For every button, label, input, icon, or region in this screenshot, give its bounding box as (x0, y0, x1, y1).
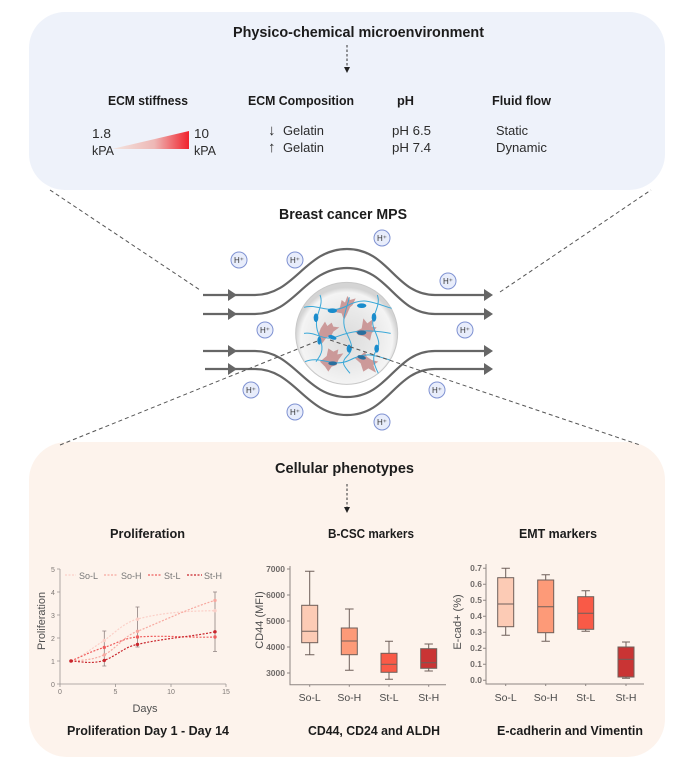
icons: H+ protons (231, 230, 473, 430)
line chart: proliferation: 10 (167, 689, 175, 696)
line chart: proliferation: 4 (51, 590, 55, 597)
box plot: CD44: So-L (299, 692, 321, 704)
box plot: CD44: So-H (337, 692, 361, 704)
box plot: CD44: 6000 (266, 590, 285, 600)
panel: B-CSC markers: CD44, CD24 and ALDH (308, 724, 440, 738)
panel: proliferation (36, 527, 230, 738)
box plot: CD44 (254, 564, 446, 704)
box plot: CD44: 3000 (266, 668, 285, 678)
icon: stiffness gradient wedge (112, 131, 189, 149)
column: ECM composition (248, 94, 354, 156)
panel: B-CSC markers (254, 527, 446, 738)
legend: So-H (121, 571, 142, 581)
line chart: proliferation: 2 (51, 636, 55, 643)
column: pH: pH 7.4 (392, 140, 431, 155)
box plot: E-cadherin: 0.0 (470, 675, 482, 685)
line chart: proliferation: 0 (51, 682, 55, 689)
box plot: CD44: 7000 (266, 564, 285, 574)
icons: H+ protons: H⁺ (377, 418, 387, 427)
column: ECM composition: Gelatin (283, 123, 324, 138)
line chart: proliferation: 15 (222, 689, 230, 696)
panel: proliferation: Proliferation Day 1 - Day 14 (67, 724, 229, 738)
panel: cellular phenotypes background (29, 442, 665, 757)
column: ECM stiffness: ECM stiffness (108, 94, 188, 108)
legend: St-H (204, 571, 222, 581)
box plot: E-cadherin: 0.1 (470, 659, 482, 669)
line chart: proliferation: Days (132, 703, 158, 715)
icon: spheroid with cells and matrix (296, 282, 398, 384)
heading: physico-chemical microenvironment: Physico-chemical microenvironment (233, 24, 484, 41)
column: ECM composition: ECM Composition (248, 94, 354, 108)
line chart: proliferation: Proliferation (36, 592, 48, 650)
column: pH: pH 6.5 (392, 123, 431, 138)
column: fluid flow (492, 94, 551, 155)
box plot: E-cadherin: So-L (495, 692, 517, 704)
icons: H+ protons: H⁺ (246, 386, 256, 395)
column: ECM stiffness: 10 (194, 126, 209, 141)
icons: H+ protons: H⁺ (260, 326, 270, 335)
diagram: fluid flow and spheroid (203, 230, 493, 430)
box plot: E-cadherin: St-L (576, 692, 595, 704)
box plot: E-cadherin: 0.6 (470, 579, 482, 589)
box plot: E-cadherin: 0.7 (470, 563, 482, 573)
box plot: E-cadherin: 0.4 (470, 611, 482, 621)
panel: physico-chemical microenvironment (29, 12, 665, 190)
box plot: E-cadherin: St-H (616, 692, 636, 704)
column: ECM stiffness: kPA (194, 143, 216, 158)
box plot: E-cadherin (452, 563, 644, 704)
column: ECM composition: ↓ (268, 122, 276, 139)
column: pH (392, 94, 431, 155)
arrow: top dashed down arrow (346, 45, 348, 71)
panel: EMT markers (452, 527, 644, 738)
column: pH: pH (397, 94, 414, 108)
box plot: E-cadherin: 0.5 (470, 595, 482, 605)
icons: H+ protons: H⁺ (234, 256, 244, 265)
column: ECM stiffness: kPA (92, 143, 114, 158)
arrows: fluid flow streamlines (203, 249, 486, 415)
arrow: bottom dashed down arrow (346, 484, 348, 511)
column: fluid flow: Static (496, 123, 528, 138)
legend (65, 571, 222, 581)
heading: cellular phenotypes: Cellular phenotypes (275, 460, 414, 477)
icons: H+ protons: H⁺ (443, 277, 453, 286)
box plot: CD44: 5000 (266, 616, 285, 626)
line chart: proliferation: 3 (51, 613, 55, 620)
line chart: proliferation: 0 (58, 689, 62, 696)
panel: EMT markers: E-cadherin and Vimentin (497, 724, 643, 738)
column: ECM composition: ↑ (268, 139, 276, 156)
icons: H+ protons: H⁺ (460, 326, 470, 335)
box plot: CD44: 4000 (266, 642, 285, 652)
icons: H+ protons: H⁺ (377, 234, 387, 243)
icons: H+ protons: H⁺ (290, 408, 300, 417)
panel: proliferation: Proliferation (110, 527, 185, 541)
line chart: proliferation: 1 (51, 659, 55, 666)
box plot: E-cadherin: 0.3 (470, 627, 482, 637)
box plot: CD44: CD44 (MFI) (254, 591, 266, 649)
box plot: E-cadherin: 0.2 (470, 643, 482, 653)
line chart: proliferation (36, 567, 230, 715)
legend: St-L (164, 571, 181, 581)
box plot: CD44: St-L (379, 692, 399, 704)
box plot: E-cadherin: E-cad+ (%) (452, 594, 464, 650)
box plot: CD44: St-H (418, 692, 439, 704)
column: fluid flow: Fluid flow (492, 94, 551, 108)
legend: So-L (79, 571, 98, 581)
panel: EMT markers: EMT markers (519, 527, 597, 541)
column: ECM stiffness (92, 94, 216, 158)
line chart: proliferation: 5 (51, 567, 55, 574)
line chart: proliferation: 5 (114, 689, 118, 696)
icons: H+ protons: H⁺ (290, 256, 300, 265)
box plot: E-cadherin: So-H (534, 692, 558, 704)
icons: H+ protons: H⁺ (432, 386, 442, 395)
panel: B-CSC markers: B-CSC markers (328, 527, 414, 541)
column: ECM stiffness: 1.8 (92, 126, 111, 141)
column: ECM composition: Gelatin (283, 140, 324, 155)
heading: breast cancer MPS: Breast cancer MPS (279, 206, 407, 223)
column: fluid flow: Dynamic (496, 140, 547, 155)
